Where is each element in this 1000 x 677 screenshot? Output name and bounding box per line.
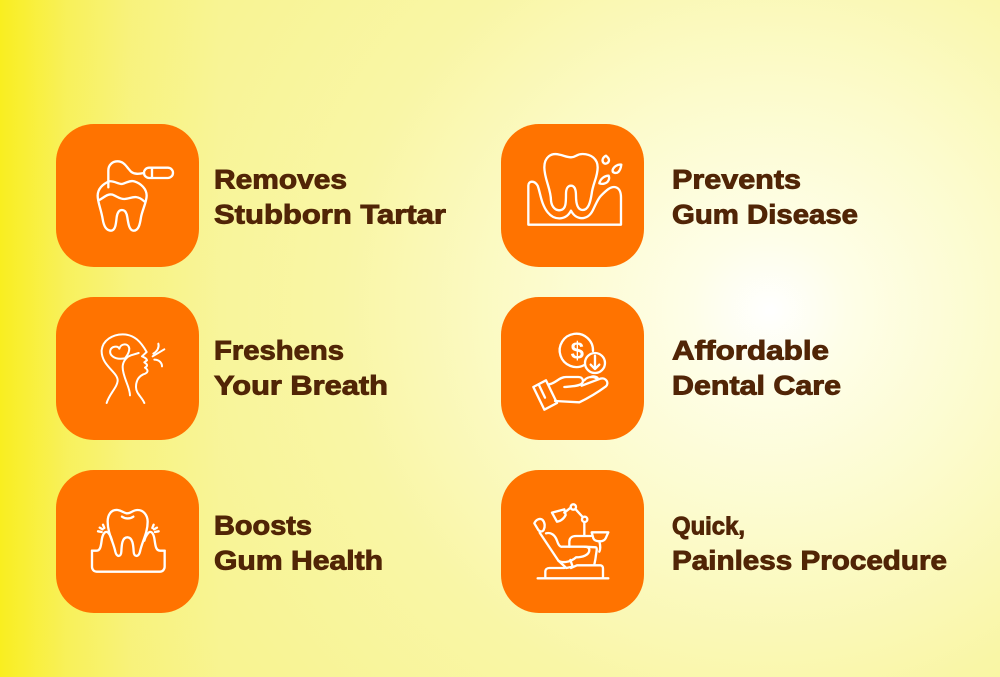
label: Affordable <box>672 336 829 366</box>
label <box>672 336 841 400</box>
label: Removes <box>214 164 347 194</box>
label: Gum Disease <box>672 200 858 230</box>
label: Painless Procedure <box>672 546 947 576</box>
label <box>672 164 858 230</box>
item: Freshens Your Breath <box>56 297 388 440</box>
item: Affordable Dental Care <box>501 297 841 440</box>
label: Your Breath <box>214 370 388 400</box>
label <box>214 164 447 230</box>
icon: hand with dollar coin: $ <box>571 338 584 365</box>
item: Boosts Gum Health <box>56 470 383 613</box>
label <box>214 510 383 576</box>
item: Quick, Painless Procedure <box>501 470 947 613</box>
icon: healthy tooth in gum <box>56 470 199 613</box>
label: Stubborn Tartar <box>214 200 447 230</box>
label: Prevents <box>672 164 801 194</box>
icon: head with heart and breath <box>56 297 199 440</box>
label: Dental Care <box>672 370 841 400</box>
icon: tooth with dental scaler <box>56 124 199 267</box>
label: Freshens <box>214 336 344 366</box>
item: Removes Stubborn Tartar <box>56 124 447 267</box>
label <box>214 336 388 400</box>
icon: tooth in gum with drops <box>501 124 644 267</box>
icon: dental chair and lamp <box>501 470 644 613</box>
label <box>672 512 947 576</box>
label: Quick, <box>672 512 745 540</box>
label: Gum Health <box>214 546 383 576</box>
icon: hand with dollar coin <box>501 297 644 440</box>
label: Boosts <box>214 510 312 540</box>
item: Prevents Gum Disease <box>501 124 858 267</box>
